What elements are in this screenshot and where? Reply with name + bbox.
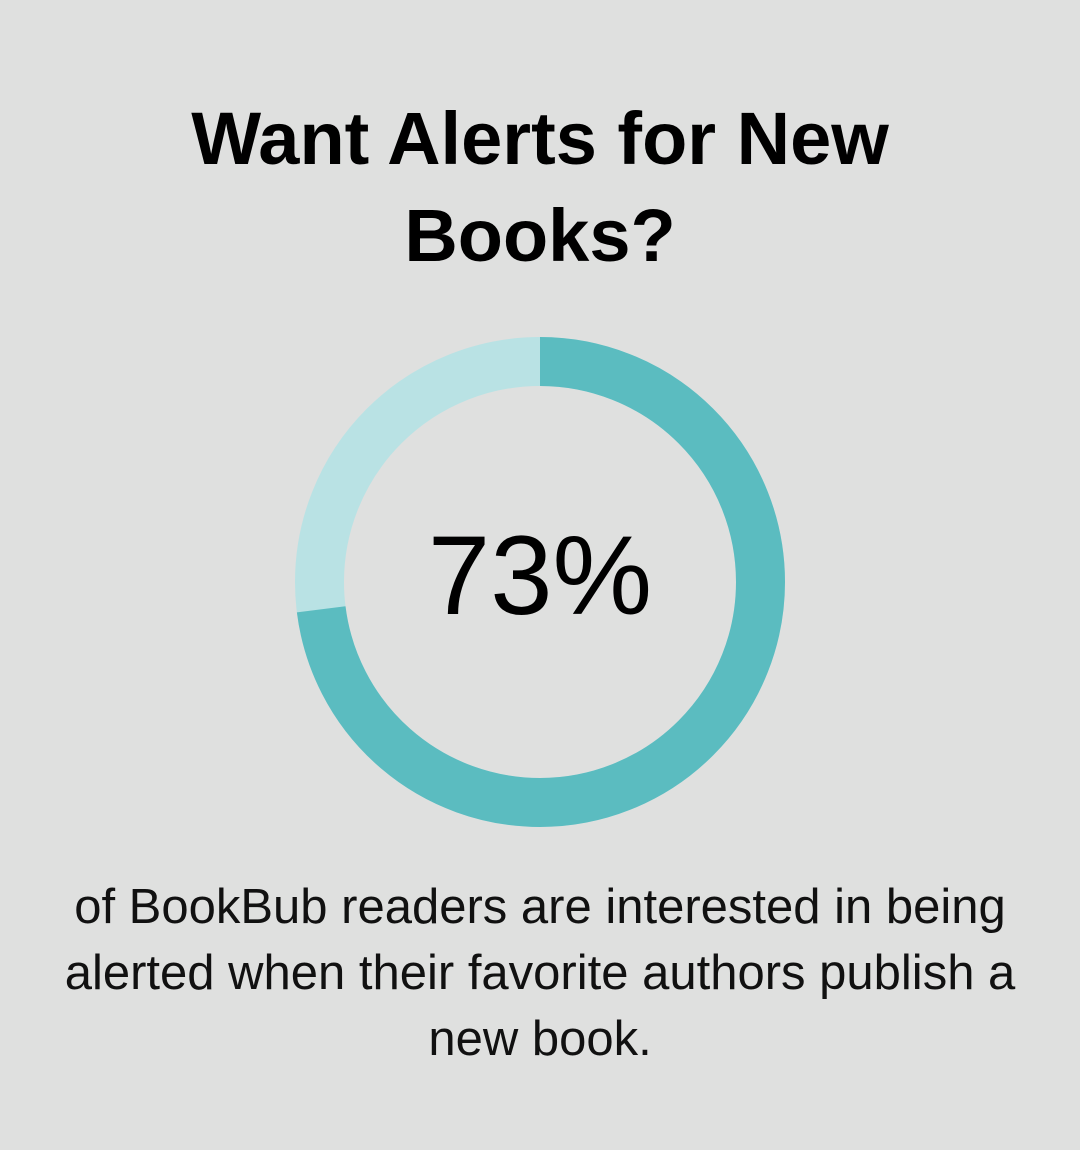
donut track (remaining 27%) xyxy=(320,362,760,802)
donut value arc (73%) xyxy=(320,362,760,802)
title: Books? xyxy=(404,194,676,277)
percentage label: 73% xyxy=(428,513,652,638)
title xyxy=(191,97,889,277)
description text: of BookBub readers are interested in being alerted when their favorite authors publish a new book. xyxy=(65,880,1015,1066)
title: Want Alerts for New xyxy=(191,97,889,180)
